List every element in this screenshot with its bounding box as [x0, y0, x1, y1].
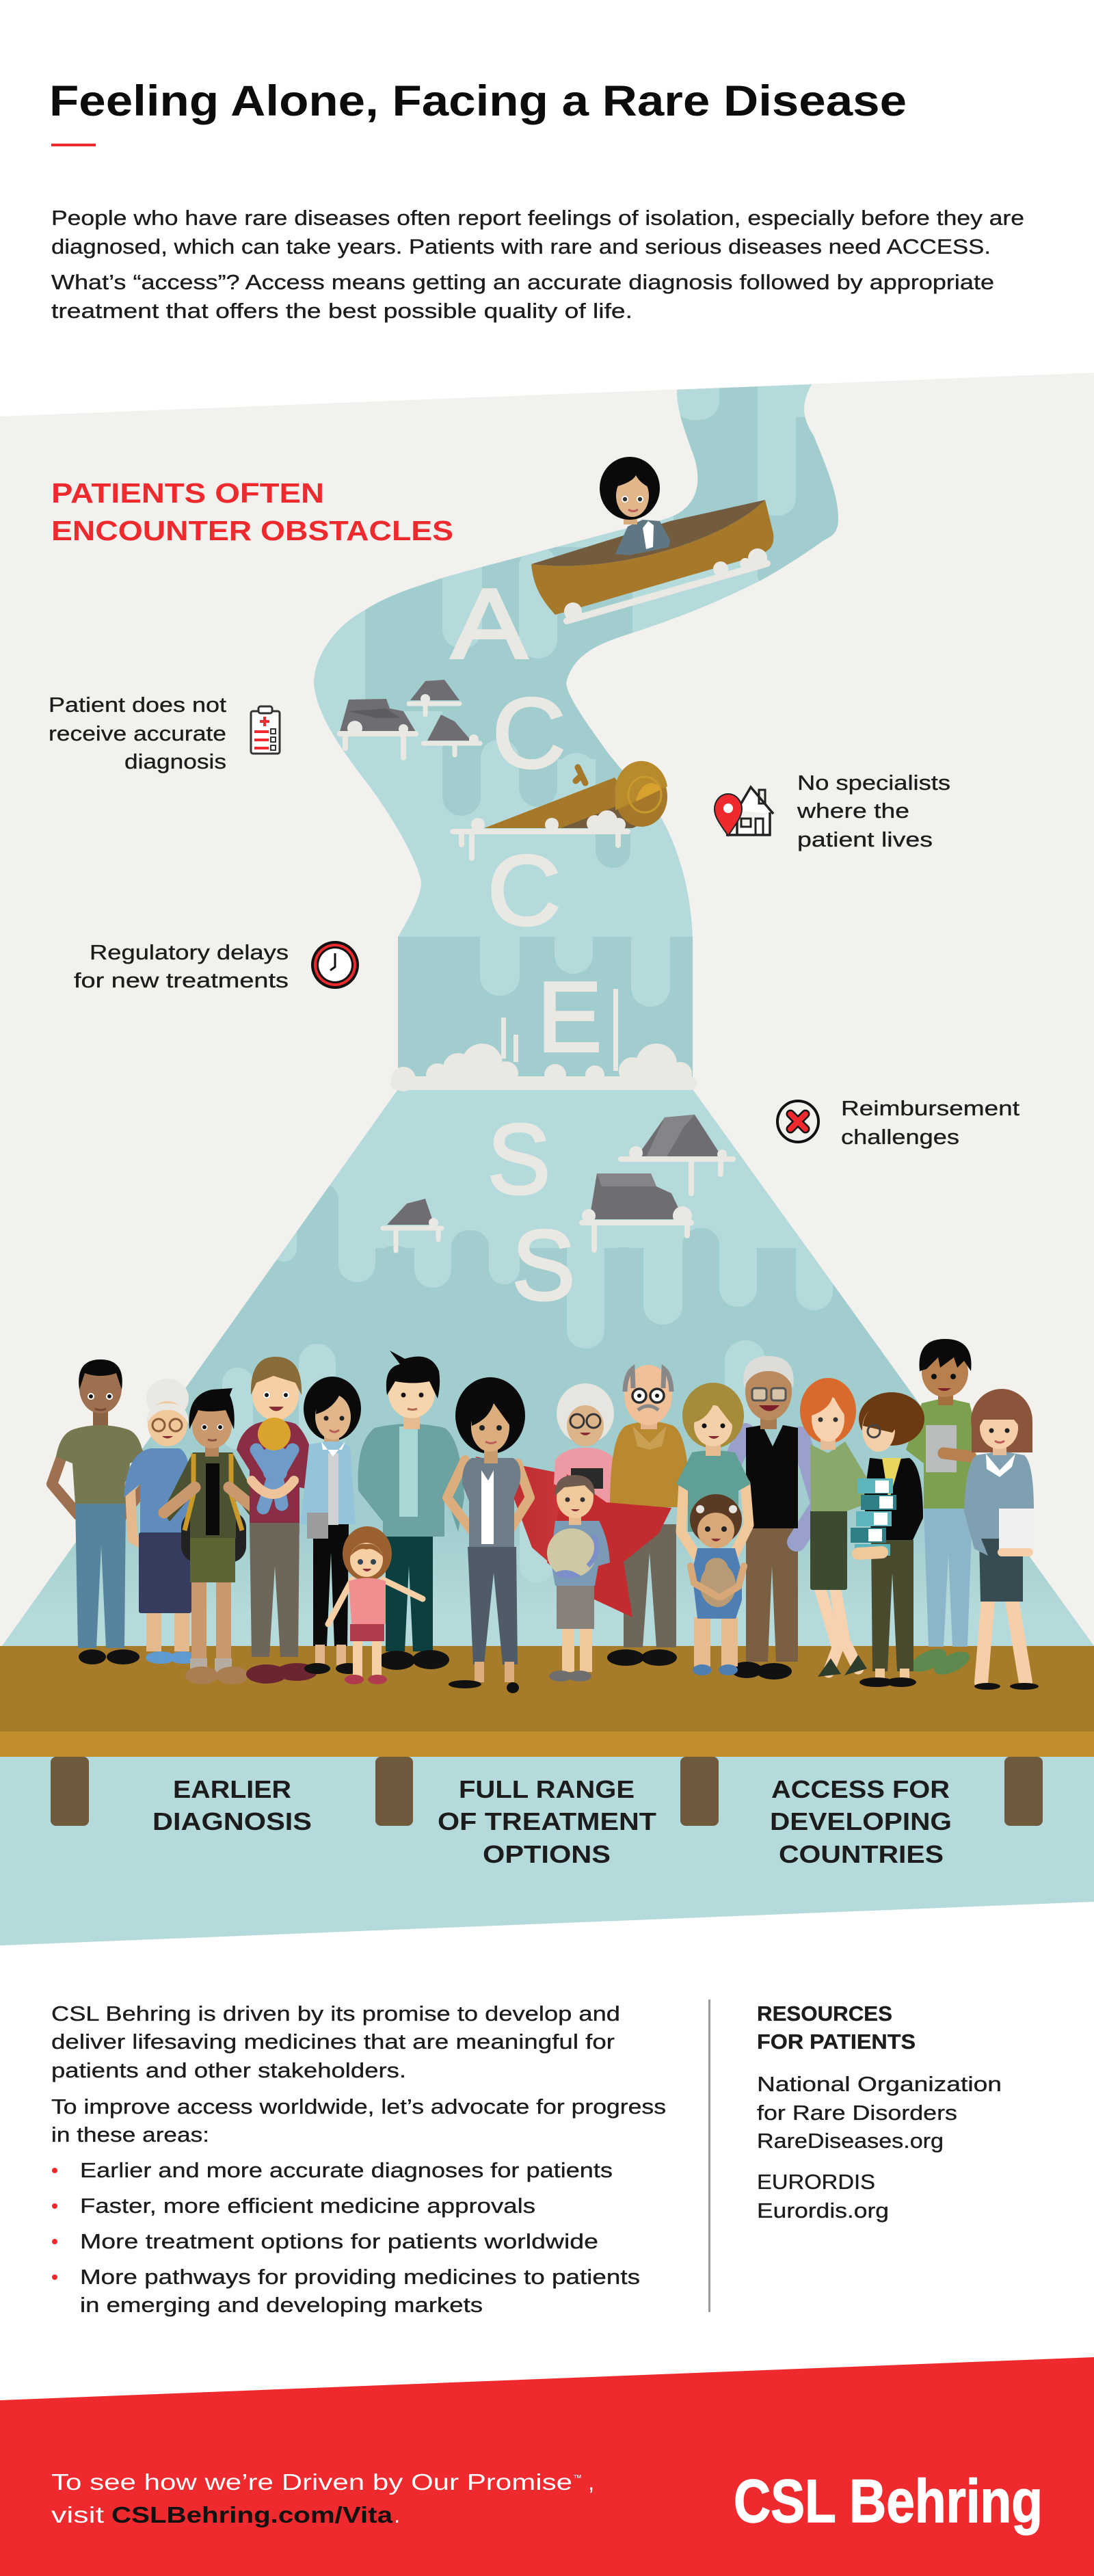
body text: advocacy: To improve access worldwide, let’s advocate for progress: [51, 2095, 666, 2119]
footer call to action: ,: [588, 2469, 594, 2495]
bullet list: More pathways for providing medicines to patients: [80, 2265, 640, 2289]
obstacle label: specialists: No specialists: [797, 771, 950, 795]
column divider: [708, 2000, 710, 2312]
obstacle label: specialists: [797, 771, 950, 851]
intro text: treatment that offers the best possible quality of life.: [51, 299, 632, 323]
person: little girl in pink: [328, 1526, 423, 1684]
obstacle label: specialists: patient lives: [797, 827, 933, 851]
person: boy with backpack: [163, 1388, 263, 1684]
icon: clock: [311, 941, 359, 989]
footer call to action: .: [394, 2502, 400, 2527]
obstacle label: regulatory: [74, 940, 289, 992]
body text: advocacy: patients and other stakeholders.: [51, 2058, 406, 2082]
obstacle label: regulatory: for new treatments: [74, 968, 289, 992]
icon: house and map pin: [715, 787, 773, 836]
obstacle label: reimbursement: [841, 1096, 1019, 1149]
intro text: People who have rare diseases often report feelings of isolation, especially before they are: [51, 206, 1024, 230]
ACCESS letters in the river: [451, 568, 602, 1320]
person: woman with black hair and envelope: [298, 1377, 362, 1674]
bullet list: [52, 2158, 640, 2317]
obstacle label: diagnosis: receive accurate: [49, 721, 226, 745]
obstacle label: diagnosis: diagnosis: [124, 749, 226, 773]
obstacle label: reimbursement: Reimbursement: [841, 1096, 1019, 1120]
body text: advocacy: [51, 2002, 666, 2147]
ACCESS letters in the river: A: [451, 568, 527, 679]
obstacles heading: PATIENTS OFTEN: [51, 477, 324, 509]
bridge posts: [51, 1757, 1043, 1826]
people group: [52, 1339, 1039, 1693]
river of access: [0, 362, 1094, 1647]
person: man in green shirt with tablet: [906, 1339, 980, 1679]
bullet list: in emerging and developing markets: [80, 2293, 483, 2317]
goal: earlier diagnosis: [152, 1775, 312, 1835]
goal: developing countries: [770, 1775, 952, 1868]
body text: advocacy: CSL Behring is driven by its promise to develop and: [51, 2002, 620, 2026]
goal: developing countries: ACCESS FOR: [771, 1775, 950, 1803]
bullet list: Faster, more efficient medicine approvals: [80, 2194, 535, 2218]
obstacle label: diagnosis: [49, 693, 226, 773]
person: man in teal cardigan: [358, 1351, 464, 1670]
title accent rule: [51, 144, 96, 146]
obstacle label: regulatory: Regulatory delays: [90, 940, 289, 964]
intro text: diagnosed, which can take years. Patients with rare and serious diseases need ACCESS.: [51, 235, 991, 258]
resources for patients: for Rare Disorders: [757, 2101, 957, 2125]
goal: treatment options: [438, 1775, 656, 1868]
log obstacle: [453, 761, 667, 858]
panel: teal goals band: [0, 1757, 1094, 1946]
bridge deck: [0, 1646, 1094, 1757]
ACCESS letters in the river: C: [488, 835, 561, 946]
footer call to action: visit: [51, 2502, 104, 2527]
patient in boat: [531, 457, 773, 621]
intro text: What’s “access”? Access means getting an accurate diagnosis followed by appropriate: [51, 270, 994, 294]
resources for patients: FOR PATIENTS: [757, 2030, 916, 2054]
intro text: [51, 206, 1024, 323]
icon: clipboard: [251, 706, 280, 754]
person: girl with teddy bear: [690, 1494, 744, 1675]
goal: earlier diagnosis: DIAGNOSIS: [152, 1807, 312, 1835]
obstacles heading: ENCOUNTER OBSTACLES: [51, 515, 453, 546]
body text: advocacy: deliver lifesaving medicines that are meaningful for: [51, 2030, 615, 2054]
resources for patients: National Organization: [757, 2072, 1002, 2096]
resources for patients: RESOURCES: [757, 2002, 892, 2026]
goal: developing countries: COUNTRIES: [779, 1840, 944, 1868]
person: woman with red cape: [447, 1377, 671, 1693]
panel: grey obstacle band: [0, 373, 1094, 1778]
person: grandmother in pink: [554, 1383, 629, 1515]
person: woman in grey-blue suit: [964, 1389, 1039, 1690]
title: Feeling Alone, Facing a Rare Disease: [49, 77, 907, 125]
person: grandmother in blue: [124, 1379, 197, 1664]
resources for patients: [757, 2002, 1002, 2222]
goal: earlier diagnosis: EARLIER: [173, 1775, 291, 1803]
resources for patients: EURORDIS: [757, 2170, 875, 2194]
icon: cross: [777, 1101, 818, 1142]
ACCESS letters in the river: E: [537, 961, 602, 1072]
logo: CSL Behring: CSL Behring: [734, 2467, 1043, 2535]
body text: advocacy: in these areas:: [51, 2123, 209, 2147]
footer call to action: ™: [573, 2473, 582, 2483]
person: man in olive shirt: [52, 1359, 147, 1664]
footer call to action: CSLBehring.com/Vita: [111, 2502, 393, 2527]
footer call to action: [51, 2469, 594, 2527]
person: red-haired woman: [800, 1378, 868, 1677]
goal: developing countries: DEVELOPING: [770, 1807, 952, 1835]
obstacle label: reimbursement: challenges: [841, 1125, 959, 1149]
person: older man in black vest: [731, 1356, 820, 1679]
person: boy holding globe: [547, 1475, 610, 1682]
obstacles heading: [51, 477, 453, 546]
ACCESS letters in the river: S: [488, 1104, 550, 1214]
goal: treatment options: FULL RANGE: [459, 1775, 635, 1803]
panel: red footer: [0, 2357, 1094, 2576]
bullet list: Earlier and more accurate diagnoses for patients: [80, 2158, 613, 2182]
goal: treatment options: OPTIONS: [483, 1840, 611, 1868]
person: woman in teal top: [676, 1383, 751, 1563]
obstacle label: diagnosis: Patient does not: [49, 693, 226, 717]
rock group: lower river: [383, 1115, 733, 1251]
obstacle label: specialists: where the: [797, 799, 909, 823]
footer call to action: To see how we’re Driven by Our Promise: [51, 2469, 572, 2495]
bullet list: More treatment options for patients worldwide: [80, 2229, 598, 2253]
clouds at the waterfall: [390, 989, 697, 1091]
person: man holding baby: [237, 1357, 319, 1684]
ACCESS letters in the river: S: [512, 1210, 575, 1320]
rock group: upper river: [340, 680, 480, 758]
goal: treatment options: OF TREATMENT: [438, 1807, 656, 1835]
person: woman carrying binders: [851, 1392, 924, 1687]
person: older man in mustard sweater: [547, 1365, 690, 1666]
resources for patients: Eurordis.org: [757, 2199, 889, 2222]
resources for patients: RareDiseases.org: [757, 2129, 944, 2153]
ACCESS letters in the river: C: [492, 678, 565, 788]
